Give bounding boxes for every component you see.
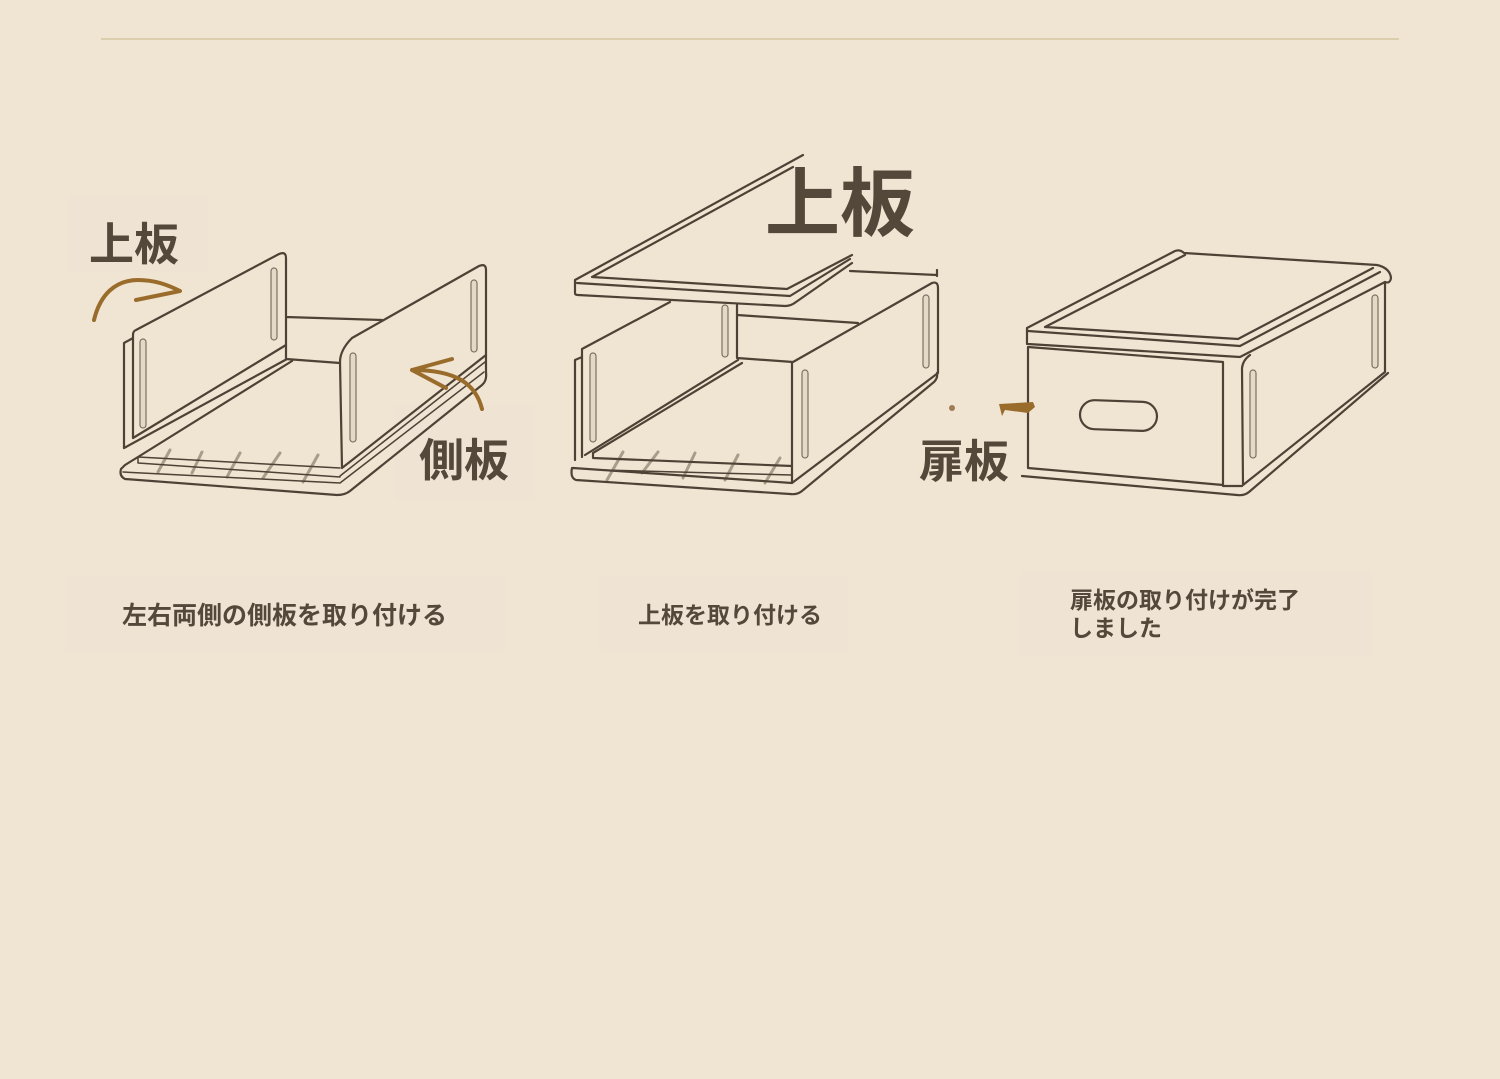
left side panel bbox=[124, 253, 382, 448]
arrow: top left curved bbox=[94, 280, 180, 320]
brown dot mark bbox=[949, 405, 955, 411]
label: 側板: 側板 bbox=[419, 435, 509, 486]
lower box with panels bbox=[572, 283, 938, 494]
caption patch 2 bbox=[598, 575, 848, 652]
caption: step 1: 左右両側の側板を取り付ける bbox=[122, 602, 447, 630]
step 3 illustration: finished box with door bbox=[949, 250, 1391, 495]
label: 上板 small: 上板 bbox=[89, 219, 179, 270]
caption: step 3 bbox=[1070, 587, 1300, 641]
label: 上板 large: 上板 bbox=[765, 162, 915, 246]
caption: step 2: 上板を取り付ける bbox=[638, 602, 822, 628]
right side panel bbox=[340, 265, 486, 468]
caption: step 3: 扉板の取り付けが完了 bbox=[1070, 587, 1300, 613]
caption: step 3: しました bbox=[1070, 615, 1162, 641]
label patch: side board bbox=[395, 405, 535, 500]
top board bbox=[575, 155, 937, 306]
caption patch 1 bbox=[65, 575, 505, 652]
arrow: right curved bbox=[412, 359, 482, 409]
lid bbox=[1027, 250, 1391, 357]
step 2 illustration: top board placed bbox=[572, 155, 938, 494]
label: 扉板: 扉板 bbox=[919, 436, 1009, 487]
caption patch 3 bbox=[1020, 572, 1372, 656]
top divider line bbox=[101, 38, 1399, 40]
door and side panel bbox=[1022, 282, 1388, 495]
door handle bbox=[1079, 400, 1157, 431]
brown smudge marks bbox=[999, 402, 1035, 416]
base tray bbox=[120, 345, 486, 495]
label patch: top board small bbox=[68, 195, 208, 273]
step 1 illustration: side panels on base bbox=[94, 253, 486, 495]
